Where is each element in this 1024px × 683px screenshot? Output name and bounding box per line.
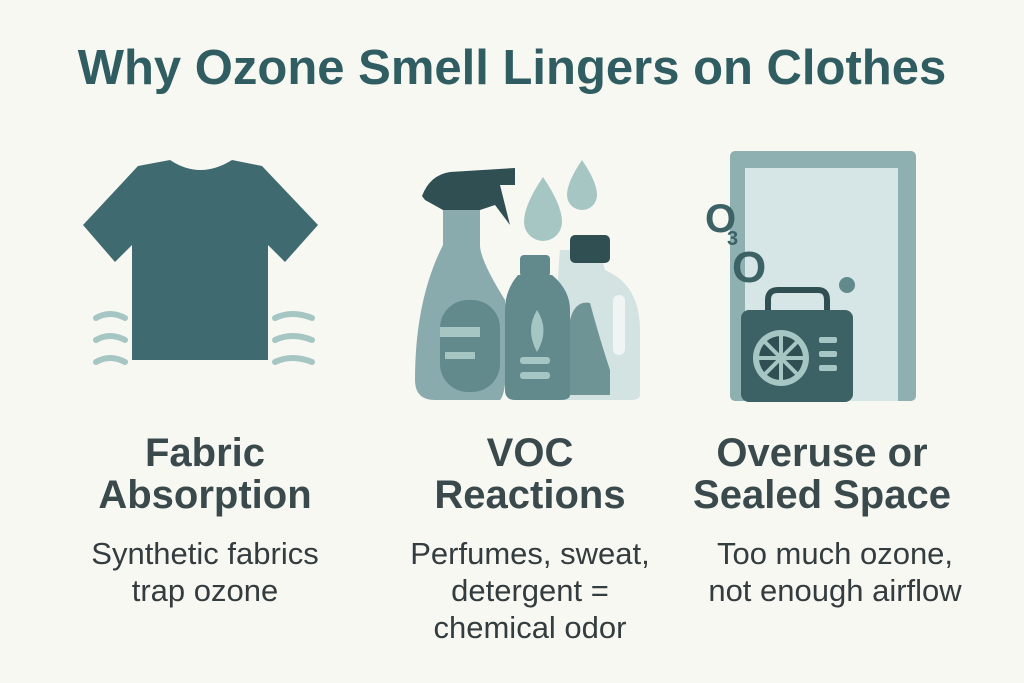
heading: voc reactions bbox=[434, 431, 626, 517]
text: overuse: not enough airflow bbox=[708, 573, 962, 608]
text: overuse: Too much ozone, bbox=[717, 536, 953, 571]
text: voc: chemical odor bbox=[434, 610, 626, 645]
heading: overuse bbox=[693, 431, 951, 517]
icon: sealed room with ozone generator: O bbox=[705, 197, 736, 241]
heading: fabric absorption: Absorption bbox=[98, 473, 312, 517]
text: fabric: trap ozone bbox=[132, 573, 278, 608]
icon: sealed room with ozone generator: 3 bbox=[727, 228, 738, 250]
icon: sealed room with ozone generator bbox=[705, 151, 916, 402]
text: voc: Perfumes, sweat, bbox=[410, 536, 650, 571]
icon: t-shirt with waves bbox=[83, 160, 318, 365]
text: fabric: Synthetic fabrics bbox=[91, 536, 319, 571]
heading: fabric absorption bbox=[98, 431, 312, 517]
icon: bottles bbox=[415, 160, 640, 400]
heading: voc reactions: Reactions bbox=[434, 473, 626, 517]
title: Why Ozone Smell Lingers on Clothes bbox=[78, 41, 946, 95]
icon: sealed room with ozone generator: O bbox=[732, 243, 766, 292]
heading: overuse: Sealed Space bbox=[693, 473, 951, 517]
heading: fabric absorption: Fabric bbox=[145, 431, 265, 475]
text: overuse bbox=[708, 536, 962, 608]
text: voc bbox=[410, 536, 650, 645]
heading: voc reactions: VOC bbox=[487, 431, 573, 475]
heading: overuse: Overuse or bbox=[716, 431, 928, 475]
text: fabric bbox=[91, 536, 319, 608]
text: voc: detergent = bbox=[451, 573, 609, 608]
